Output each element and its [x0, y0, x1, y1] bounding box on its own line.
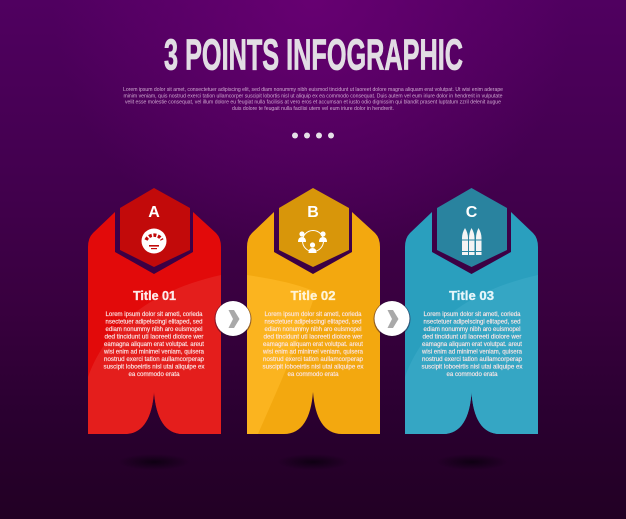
- card B text: nostrud exerci tation aullamcorperap: [263, 356, 363, 363]
- card A text: suscipit loboeirtis nisl utai aliquipe ex: [104, 364, 205, 370]
- icon: gauge: [142, 228, 166, 254]
- card B text: [262, 311, 364, 378]
- card B text: ea commodo erata: [288, 371, 339, 378]
- panel: card B: [247, 188, 380, 434]
- card A text: nostrud exerci tation aullamcorperap: [104, 356, 204, 363]
- card A body: [88, 212, 221, 434]
- card C title: Title 03: [449, 289, 494, 303]
- arrow: A to B: [214, 300, 252, 338]
- intro paragraph: duis dolore te feugait nulla facilisi utem vel eum iriure dolor in hendrerit.: [232, 106, 394, 112]
- card C text: nostrud exerci tation aullamcorperap: [422, 356, 522, 363]
- intro paragraph: velit esse molestie consequat, vel illum dolore eu feugiat nulla facilisis at vero eros et accumsan et iusto odio dignissim qui blandit prasent luptatum zzril delenit augue: [125, 100, 501, 106]
- intro paragraph: Lorem ipsum dolor sit amet, consectetuer adipiscing elit, sed diam nonummy nibh euismod tincidunt ut laoreet dolore magna aliquam erat volutpat. Ut wisi enim aderape: [123, 87, 503, 93]
- card B body: [247, 212, 380, 434]
- card A text: wisi enim ad minimel veniam, quisera: [103, 348, 204, 356]
- card C text: Lorem ipsum dolor sit ametl, corieda: [424, 311, 521, 318]
- card A text: ea commodo erata: [128, 371, 180, 378]
- panel: card A: [88, 188, 221, 434]
- arrow: B to C: [374, 300, 410, 338]
- panel: card C: [405, 188, 538, 434]
- card C text: wisi enim ad minimel veniam, quisera: [421, 348, 522, 356]
- card C light facet: [405, 275, 538, 434]
- card B text: suscipit loboeirtis nisl utai aliquipe ex: [262, 364, 364, 370]
- card C body: [405, 212, 538, 434]
- card B text: Lorem ipsum dolor sit ametl, corieda: [264, 311, 362, 318]
- icon: three bullets: [461, 228, 482, 255]
- card C letter: C: [466, 204, 478, 221]
- card A text: ded tincidunt uti laoreeti diolore wer: [104, 334, 204, 340]
- card B text: eamagna aliquam erat volutpat. areut: [263, 341, 363, 348]
- card C text: [421, 311, 523, 378]
- card B hexagon: [279, 188, 349, 267]
- icon: people network: [298, 230, 327, 253]
- card C text: suscipit loboeirtis nisl utai aliquipe ex: [422, 364, 523, 370]
- card C text: eamagna aliquam erat volutpat. areut: [422, 341, 522, 348]
- card C text: ded tincidunt uti laoreeti diolore wer: [422, 334, 522, 340]
- card A letter: A: [148, 204, 160, 221]
- card C text: ea commodo erata: [446, 371, 498, 378]
- card C hexagon: [437, 188, 507, 267]
- card B text: nsectetuer adipelscingi elitaped, sed: [264, 318, 362, 326]
- card B light facet: [247, 275, 316, 434]
- card A light facet: [88, 275, 221, 434]
- card B text: ediam nonummy nibh aro euismopel: [264, 326, 362, 333]
- card A title: Title 01: [133, 289, 176, 303]
- card C text: nsectetuer adipelscingi elitaped, sed: [424, 318, 521, 326]
- card B title: Title 02: [290, 289, 336, 303]
- intro paragraph: [123, 87, 503, 112]
- card C text: ediam nonummy nibh aro euismopel: [424, 326, 521, 333]
- card B text: ded tincidunt uti laoreeti diolore wer: [264, 334, 363, 340]
- card A text: Lorem ipsum dolor sit ametl, corieda: [106, 311, 203, 318]
- card B letter: B: [307, 204, 319, 221]
- card A hexagon: [120, 188, 190, 267]
- card B text: wisi enim ad minimel veniam, quisera: [262, 348, 363, 356]
- card A text: [103, 311, 205, 378]
- card A text: ediam nonummy nibh aro euismopel: [106, 326, 203, 333]
- pagination dots: [292, 132, 334, 138]
- floor shadows: [118, 454, 508, 470]
- card A text: nsectetuer adipelscingi elitaped, sed: [106, 318, 203, 326]
- intro paragraph: minim veniam, quis nostrud exerci tation ullamcorper suscipit lobortis nisl ut aliquip ex ea commodo consequat. Duis autem vel eum iriure dolor in hendrerit in vulputate: [124, 94, 503, 100]
- card A text: eamagna aliquam erat volutpat. areut: [104, 341, 204, 348]
